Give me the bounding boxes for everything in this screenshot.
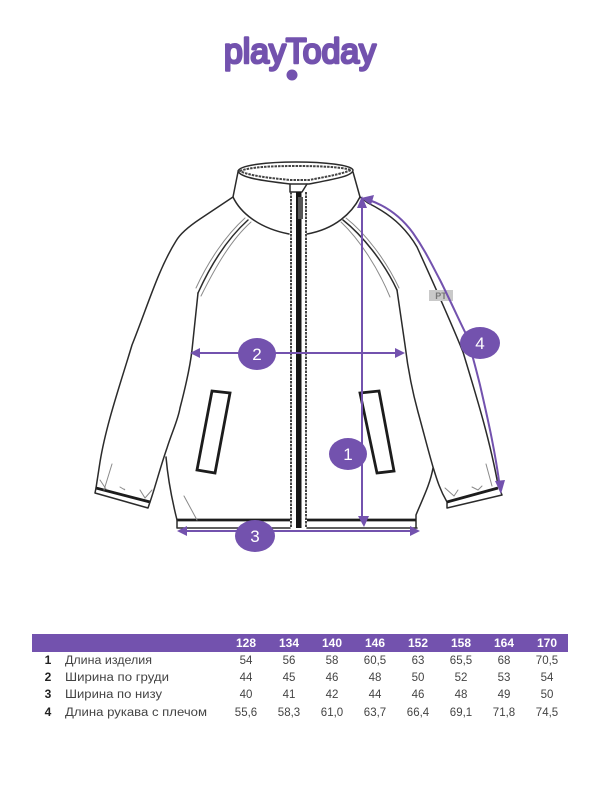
row 4: sleeve length with shoulder: 4 [45, 705, 52, 719]
row 3: hem width: 41 [283, 689, 295, 701]
row 2: chest width: 48 [369, 672, 381, 684]
row 2: chest width: 46 [326, 672, 338, 684]
table header bar: 164 [494, 636, 514, 650]
row 3: hem width: 44 [369, 689, 382, 701]
row 1: garment length: 56 [283, 655, 295, 667]
row 2: chest width: 54 [541, 672, 554, 684]
row 2: chest width: 45 [283, 672, 295, 684]
row 4: sleeve length with shoulder: 63,7 [364, 707, 386, 719]
collar [233, 162, 360, 234]
row 4: sleeve length with shoulder: 66,4 [407, 707, 430, 719]
row 2: chest width: 44 [240, 672, 253, 684]
measurement 2: chest width arrow: 2 [252, 345, 262, 364]
table header bar: 158 [451, 636, 471, 650]
measurement 1: length arrow [329, 196, 369, 527]
size table [32, 634, 568, 719]
row 2: chest width: 52 [455, 672, 467, 684]
row 4: sleeve length with shoulder: 69,1 [450, 707, 472, 719]
right pocket [360, 391, 394, 473]
right sleeve and shoulder [360, 197, 502, 508]
row 1: garment length: 65,5 [450, 655, 472, 667]
row 4: sleeve length with shoulder: 74,5 [536, 707, 558, 719]
row 2: chest width: 53 [498, 672, 510, 684]
row 2: chest width [45, 670, 554, 684]
row 3: hem width: 48 [455, 689, 467, 701]
row 4: sleeve length with shoulder: 71,8 [493, 707, 515, 719]
table header bar [32, 634, 568, 652]
row 1: garment length: Длина изделия [65, 655, 152, 667]
row 2: chest width: 50 [412, 672, 424, 684]
row 3: hem width: 3 [45, 687, 52, 701]
row 3: hem width: 42 [326, 689, 338, 701]
measurement 1: length arrow: 1 [343, 445, 353, 464]
row 4: sleeve length with shoulder [45, 705, 558, 719]
right cuff [445, 464, 498, 502]
row 1: garment length: 63 [412, 655, 424, 667]
table header bar: 146 [365, 636, 385, 650]
table header bar: 128 [236, 636, 256, 650]
row 4: sleeve length with shoulder: 55,6 [235, 707, 257, 719]
table header bar: 134 [279, 636, 299, 650]
row 1: garment length [45, 653, 558, 667]
row 1: garment length: 58 [326, 655, 338, 667]
sleeve label PT: PT [435, 291, 447, 301]
jacket technical drawing [95, 162, 502, 528]
left body side and hem [166, 457, 290, 528]
row 1: garment length: 1 [45, 653, 52, 667]
right body side and hem [307, 468, 433, 528]
sleeve label PT [429, 290, 453, 301]
table header bar: 152 [408, 636, 428, 650]
right raglan seam [341, 218, 399, 297]
row 4: sleeve length with shoulder: 61,0 [321, 707, 343, 719]
left raglan seam [196, 218, 251, 296]
row 2: chest width: Ширина по груди [65, 672, 169, 684]
row 1: garment length: 60,5 [364, 655, 386, 667]
row 3: hem width: 50 [541, 689, 553, 701]
row 3: hem width: 40 [240, 689, 252, 701]
measurement 4: sleeve length arrow [361, 195, 505, 494]
row 1: garment length: 54 [240, 655, 253, 667]
measurement 2: chest width arrow [190, 338, 405, 370]
row 4: sleeve length with shoulder: Длина рукава с плечом [65, 707, 207, 719]
logo: playToday: playToday [224, 32, 376, 71]
left cuff [95, 464, 152, 508]
row 1: garment length: 68 [498, 655, 510, 667]
measurement 3: hem width arrow [177, 520, 420, 552]
left sleeve and shoulder [96, 197, 233, 502]
row 3: hem width [45, 687, 553, 701]
row 3: hem width: 46 [412, 689, 424, 701]
measurement 3: hem width arrow: 3 [250, 527, 260, 546]
measurement 4: sleeve length arrow: 4 [475, 334, 485, 353]
left pocket [197, 391, 230, 473]
table header bar: 170 [537, 636, 557, 650]
table header bar: 140 [322, 636, 342, 650]
row 1: garment length: 70,5 [536, 655, 558, 667]
row 4: sleeve length with shoulder: 58,3 [278, 707, 300, 719]
row 3: hem width: 49 [498, 689, 510, 701]
zipper placket [291, 192, 306, 528]
row 3: hem width: Ширина по низу [65, 689, 162, 701]
row 2: chest width: 2 [45, 670, 52, 684]
